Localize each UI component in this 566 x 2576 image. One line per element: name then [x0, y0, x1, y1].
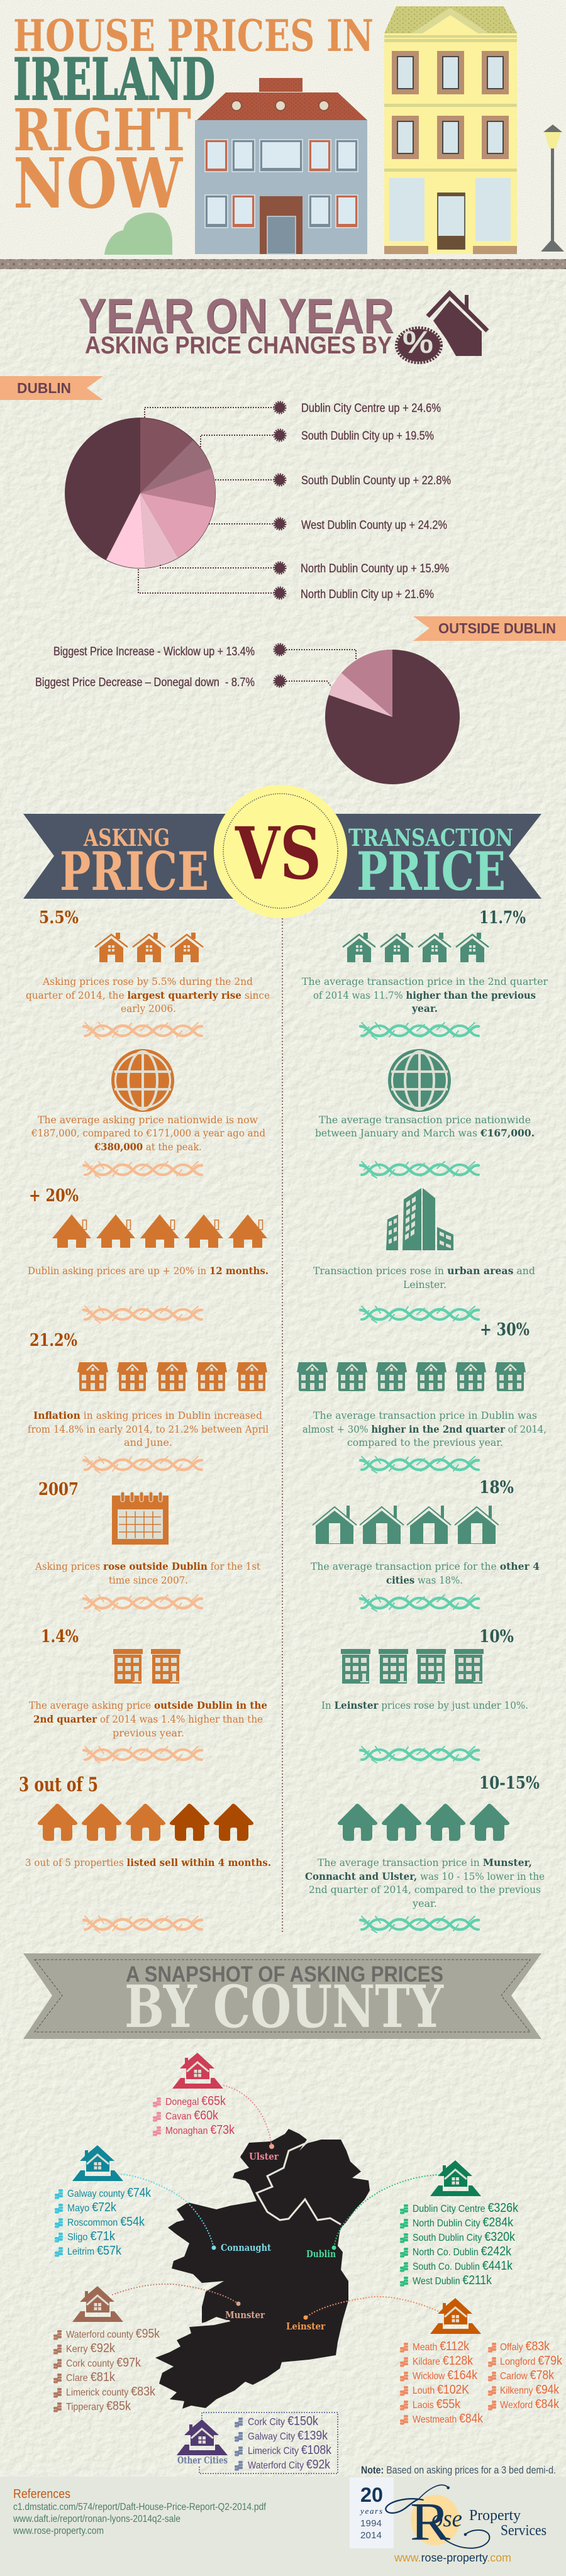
region: Connaught [55, 2145, 271, 2258]
markers [274, 644, 286, 687]
text [31, 1114, 265, 1153]
leader line [334, 2175, 440, 2248]
text: early 2006. [121, 1002, 176, 1014]
icon: globe [113, 1050, 172, 1111]
ribbon: Dublin: DUBLIN [17, 380, 71, 396]
labels: West Dublin County up + 24.2% [301, 519, 447, 532]
prices [153, 2094, 235, 2137]
prices: Meath €112k [413, 2340, 470, 2353]
leader line [112, 2284, 238, 2304]
text [29, 1699, 267, 1739]
vs circle [214, 785, 347, 918]
item: 10-15% [305, 1774, 545, 1909]
text [302, 975, 548, 1014]
icon: house [72, 2145, 123, 2181]
icon: house [430, 2160, 481, 2196]
prices: Wicklow €164k [413, 2368, 478, 2382]
prices [235, 2414, 332, 2472]
prices: South Co. Dublin €441k [413, 2259, 513, 2273]
text: Asking prices rose by 5.5% during the 2nd [42, 975, 253, 987]
text [28, 1409, 269, 1448]
region label: Munster [225, 2309, 265, 2321]
prices: Clare €81k [66, 2370, 116, 2384]
text: Inflation in asking prices in Dublin increased [33, 1409, 262, 1421]
heading: A SNAPSHOT OF ASKING PRICES [126, 1962, 443, 1987]
title [13, 11, 374, 224]
labels: Dublin City Centre up + 24.6% [301, 402, 441, 415]
prices [400, 2340, 563, 2426]
prices: West Dublin €211k [413, 2273, 492, 2287]
pie chart: Dublin [65, 418, 216, 569]
prices: Cavan €60k [165, 2109, 219, 2123]
text: of 2014 was 11.7% higher than the previous [313, 989, 536, 1001]
prices: Tipperary €85k [66, 2399, 131, 2413]
text: 2nd quarter of 2014, compared to the previous [309, 1884, 541, 1896]
text: Leinster. [403, 1279, 447, 1291]
region label: Connaught [221, 2242, 271, 2253]
text: between January and March was €167,000. [315, 1127, 535, 1139]
ribbon: outside Dublin: OUTSIDE DUBLIN [438, 620, 556, 636]
prices: North Co. Dublin €242k [413, 2245, 512, 2258]
icon: house with percent badge: % [402, 325, 433, 360]
icon: office buildings [386, 1188, 453, 1250]
ribbon [23, 814, 541, 899]
prices: Galway City €139k [248, 2429, 328, 2443]
icon: 3 houses [95, 933, 203, 962]
divider icon [84, 1916, 202, 1933]
item: +30% [297, 1320, 547, 1448]
prices: Offaly €83k [500, 2340, 550, 2353]
icon: 4 houses [338, 1804, 509, 1841]
item: 10% [321, 1627, 528, 1711]
divider icon [360, 1746, 479, 1763]
item: 2007 [35, 1480, 261, 1586]
divider icon [360, 1457, 479, 1473]
text: compared to the previous year. [347, 1436, 503, 1448]
connector lines [138, 408, 356, 687]
pie chart: outside Dublin [325, 650, 460, 784]
item: 21.2% [28, 1331, 269, 1448]
text: previous year. [113, 1727, 184, 1739]
leader line [121, 2174, 214, 2248]
icon: 5 town houses [77, 1362, 267, 1391]
references: References [13, 2487, 70, 2501]
prices [53, 2327, 160, 2413]
text: The average asking price nationwide is now [38, 1114, 258, 1126]
heading: BY COUNTY [125, 1972, 444, 2041]
leader line [306, 2297, 438, 2318]
icon: calendar [112, 1492, 169, 1545]
logo: Rose Property Services: Services [501, 2523, 547, 2539]
section heading: year on year [79, 288, 487, 363]
item: 2007: 2007 [38, 1480, 79, 1499]
divider icon [84, 1162, 202, 1178]
references: c1.dmstatic.com/574/report/Daft-House-Price-Report-Q2-2014.pdf [13, 2502, 267, 2512]
divider icon [84, 1457, 202, 1473]
prices: North Dublin City €284k [413, 2216, 514, 2229]
prices: Donegal €65k [165, 2094, 226, 2108]
illustration: yellow house [384, 6, 517, 254]
text: The average asking price outside Dublin in the [29, 1699, 267, 1711]
divider icon [84, 1306, 202, 1323]
prices: Waterford City €92k [248, 2458, 331, 2472]
ribbon: outside Dublin [413, 616, 566, 641]
road strip [0, 259, 566, 269]
text: and June. [124, 1436, 172, 1448]
title: RIGHT [13, 96, 191, 164]
text [315, 1114, 535, 1139]
text: year. [411, 1002, 438, 1014]
text [35, 1560, 261, 1586]
labels: North Dublin City up + 21.6% [301, 588, 434, 601]
prices: Limerick City €108k [248, 2443, 332, 2457]
logo: Rose Property Services: R [410, 2491, 451, 2551]
logo: 20 years: years [359, 2506, 382, 2516]
vs circle: VS [235, 811, 321, 896]
item: +20%: + 20% [29, 1186, 79, 1206]
logo: 20 years: 1994 [360, 2518, 382, 2529]
region: other cities [177, 2412, 338, 2473]
prices: Limerick county €83k [66, 2385, 156, 2399]
prices: Wexford €84k [500, 2397, 560, 2411]
prices: South Dublin City €320k [413, 2230, 516, 2244]
labels [301, 402, 451, 601]
text: The average transaction price in Dublin was [313, 1409, 537, 1421]
item: 1.4% [29, 1627, 267, 1739]
item: +30%: + 30% [480, 1320, 530, 1340]
left heading: PRICE [60, 840, 209, 902]
vs banner [23, 785, 541, 918]
icon: 6 town houses [297, 1362, 526, 1391]
prices: Louth €102K [413, 2383, 470, 2397]
prices: Carlow €78k [500, 2368, 555, 2382]
labels: Biggest Price Increase - Wicklow up + 13.4% [53, 645, 255, 658]
map of Ireland [155, 2129, 370, 2409]
region: Munster [53, 2284, 265, 2413]
icon: house [430, 2298, 481, 2334]
prices: Cork county €97k [66, 2356, 142, 2370]
column: asking price [19, 908, 271, 1933]
logo: 20 years [350, 2477, 394, 2548]
dotted box [199, 2412, 338, 2473]
text: €380,000 at the peak. [94, 1141, 202, 1153]
divider icon [84, 1023, 202, 1039]
text [313, 1265, 535, 1291]
divider icon [360, 1916, 479, 1933]
item: 5.5% [26, 908, 270, 1014]
references: www.daft.ie/report/ronan-lyons-2014q2-sale [13, 2514, 180, 2524]
right heading: PRICE [357, 840, 506, 902]
prices: Westmeath €84k [413, 2412, 484, 2426]
text: year. [412, 1897, 437, 1909]
text: cities was 18%. [386, 1574, 463, 1586]
region: Ulster [153, 2053, 279, 2162]
illustration: blue house [195, 78, 367, 254]
right heading: TRANSACTION [348, 824, 513, 852]
text: almost + 30% higher in the 2nd quarter of 2014, [302, 1423, 547, 1435]
logo: 20 years: 2014 [360, 2530, 382, 2541]
prices: Galway county €74k [67, 2186, 152, 2200]
prices: Sligo €71k [67, 2229, 116, 2243]
item: 1.4%: 1.4% [41, 1627, 79, 1646]
divider icon [84, 1746, 202, 1763]
item: 10%: 10% [479, 1627, 514, 1646]
labels: Biggest Price Decrease – Donegal down - 8.7% [35, 676, 255, 689]
prices: Longford €79k [500, 2354, 563, 2368]
text: Connacht and Ulster, was 10 - 15% lower in the [305, 1870, 545, 1882]
right heading [348, 824, 513, 902]
item: 18% [311, 1478, 540, 1586]
text: 2nd quarter of 2014 was 1.4% higher than the [33, 1713, 263, 1725]
text: The average transaction price in the 2nd quarter [302, 975, 548, 987]
labels: South Dublin City up + 19.5% [301, 430, 434, 443]
prices: Kerry €92k [66, 2341, 116, 2355]
item: +20% [28, 1186, 269, 1277]
icon: house with percent badge [396, 293, 487, 363]
text: quarter of 2014, the largest quarterly rise since [26, 989, 270, 1001]
item: 11.7%: 11.7% [479, 908, 526, 928]
ribbon: Dublin [0, 376, 103, 400]
region label: Ulster [249, 2151, 279, 2162]
prices: Kilkenny €94k [500, 2383, 560, 2397]
region label: Other Cities [177, 2455, 228, 2466]
text: The average transaction price for the other 4 [311, 1560, 540, 1572]
leader line [223, 2085, 272, 2146]
item: 21.2%: 21.2% [30, 1331, 77, 1350]
item: 10-15%: 10-15% [479, 1774, 540, 1793]
icon: 4 apartment blocks [341, 1649, 484, 1684]
prices: Mayo €72k [67, 2201, 117, 2214]
labels: North Dublin County up + 15.9% [301, 562, 449, 575]
prices: Roscommon €54k [67, 2215, 145, 2229]
logo: Rose Property Services: ose [431, 2506, 462, 2532]
prices: Kildare €128k [413, 2354, 474, 2368]
title: NOW [13, 143, 183, 224]
text: Asking prices rose outside Dublin for the 1st [35, 1560, 261, 1572]
logo: Rose Property Services: Property [469, 2507, 521, 2524]
labels: South Dublin County up + 22.8% [301, 474, 451, 487]
column: transaction price [297, 908, 548, 1933]
text: 3 out of 5 properties listed sell within 4 months. [25, 1857, 271, 1868]
item: 3 out of 5: 3 out of 5 [19, 1774, 98, 1796]
text [311, 1560, 540, 1586]
divider icon [360, 1595, 479, 1611]
text [305, 1857, 545, 1909]
labels [35, 645, 255, 689]
text: Dublin asking prices are up + 20% in 12 months. [28, 1265, 269, 1277]
item: urban areas [313, 1188, 535, 1291]
section heading: year on year: YEAR ON YEAR [79, 288, 394, 343]
left heading: ASKING [83, 824, 170, 852]
illustration: bush [104, 213, 172, 255]
icon: 4 houses [313, 1506, 499, 1544]
icon: house [172, 2053, 223, 2089]
logo: 20 years: 20 [360, 2484, 383, 2506]
header panel [0, 0, 566, 269]
item: 11.7% [302, 908, 548, 1014]
prices [55, 2186, 152, 2258]
region: Dublin [306, 2160, 519, 2287]
item: nationwide asking [31, 1050, 265, 1153]
county banner [23, 1953, 541, 2041]
left heading [60, 824, 209, 902]
divider icon [360, 1306, 479, 1323]
prices: Leitrim €57k [67, 2244, 122, 2258]
region: Leinster [286, 2297, 563, 2426]
item: 5.5%: 5.5% [39, 908, 79, 928]
logo: Rose Property Services [386, 2485, 547, 2551]
icon: globe [390, 1050, 449, 1111]
section heading: year on year: ASKING PRICE CHANGES BY [85, 332, 392, 359]
text: €187,000, compared to €171,000 a year ago and [31, 1127, 265, 1139]
references [13, 2487, 267, 2536]
icon: 4 houses [343, 933, 489, 962]
prices [400, 2201, 519, 2287]
divider icon [84, 1595, 202, 1611]
text: Transaction prices rose in urban areas and [313, 1265, 535, 1277]
item: 18%: 18% [479, 1478, 514, 1497]
text: time since 2007. [109, 1574, 188, 1586]
text: The average transaction price in Munster, [318, 1857, 532, 1868]
title: HOUSE PRICES IN [13, 11, 374, 62]
markers [274, 402, 286, 599]
footer panel [0, 2477, 566, 2576]
logo: website: www.rose-property.com [394, 2551, 511, 2564]
prices: Monaghan €73k [165, 2123, 235, 2137]
illustration: street lamp [541, 125, 564, 252]
prices: Waterford county €95k [66, 2327, 160, 2341]
text: from 14.8% in early 2014, to 21.2% between April [28, 1423, 269, 1435]
prices: Cork City €150k [248, 2414, 319, 2428]
title: IRELAND [13, 47, 215, 113]
item: nationwide transaction [315, 1050, 535, 1139]
icon: 5 houses [52, 1214, 267, 1248]
icon: 5 houses, 2 highlighted [38, 1804, 253, 1841]
text [26, 975, 270, 1014]
prices: Dublin City Centre €326k [413, 2201, 519, 2215]
icon: house [72, 2286, 123, 2322]
text: In Leinster prices rose by just under 10%. [321, 1699, 528, 1711]
text [302, 1409, 547, 1448]
item: 3 out of 5 [19, 1774, 271, 1868]
panel: outside Dublin [35, 616, 566, 784]
icon: house [177, 2419, 228, 2455]
region label: Leinster [286, 2321, 326, 2332]
divider icon [360, 1023, 479, 1039]
text: The average transaction price nationwide [319, 1114, 531, 1126]
references: www.rose-property.com [13, 2526, 104, 2536]
icon: 2 apartment blocks [113, 1649, 180, 1684]
divider icon [360, 1162, 479, 1178]
header background [0, 0, 566, 269]
prices: Laois €55k [413, 2397, 461, 2411]
region label: Dublin [306, 2248, 336, 2260]
panel: Dublin asking price changes [0, 376, 451, 687]
